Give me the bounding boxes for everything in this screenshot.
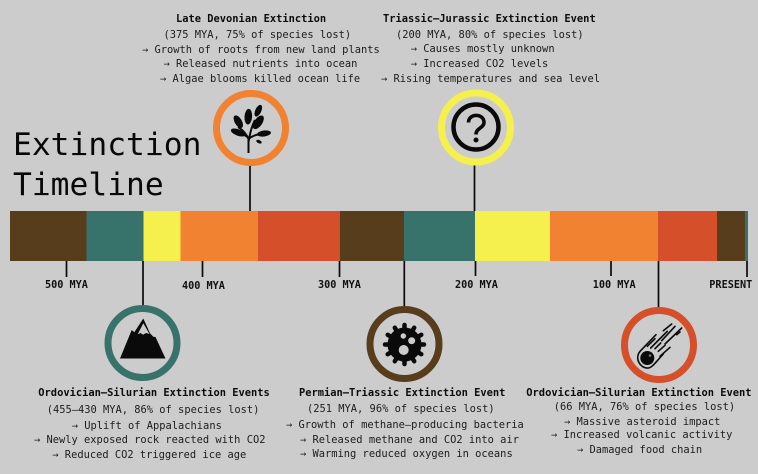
- panel: Permian-Triassic text: Permian–Triassic Extinction Event: [299, 387, 505, 399]
- panel: end-Cretaceous text: Ordovician–Silurian Extinction Event: [526, 387, 752, 399]
- title: [13, 127, 201, 203]
- title: Extinction: [13, 127, 201, 163]
- icon: bacteria in brown ring: [370, 310, 439, 378]
- panel: end-Cretaceous text: → Increased volcanic activity: [551, 429, 732, 441]
- panel: Permian-Triassic text: → Released methane and CO2 into air: [300, 434, 519, 446]
- panel: end-Cretaceous text: (66 MYA, 76% of species lost): [554, 401, 735, 413]
- time axis labels: [45, 280, 752, 292]
- panel: Permian-Triassic text: → Warming reduced oxygen in oceans: [300, 448, 513, 460]
- panel: Late Devonian text: → Growth of roots from new land plants: [142, 44, 380, 56]
- panel: Late Devonian text: [142, 13, 380, 85]
- panel: Ordovician-Silurian text: [34, 387, 270, 461]
- icon: mountain in teal ring: [108, 308, 177, 378]
- panel: Ordovician-Silurian text: Ordovician–Silurian Extinction Events: [38, 387, 270, 399]
- panel: Triassic-Jurassic text: → Causes mostly unknown: [411, 43, 555, 55]
- panel: Triassic-Jurassic text: → Increased CO2 levels: [411, 58, 548, 70]
- panel: Triassic-Jurassic text: (200 MYA, 80% of species lost): [396, 29, 584, 41]
- time axis labels: 200 MYA: [455, 280, 498, 291]
- panel: Ordovician-Silurian text: (455–430 MYA, 86% of species lost): [47, 404, 259, 416]
- panel: end-Cretaceous text: → Massive asteroid impact: [564, 416, 720, 428]
- panel: Permian-Triassic text: (251 MYA, 96% of species lost): [307, 403, 495, 415]
- connector lines and tick marks: [66, 164, 747, 308]
- time axis labels: 100 MYA: [593, 280, 636, 291]
- timeline bar: [10, 211, 748, 261]
- panel: end-Cretaceous text: → Damaged food chain: [577, 444, 702, 456]
- icon: asteroid in red ring: [624, 310, 694, 380]
- time axis labels: 300 MYA: [318, 280, 361, 291]
- icon: plant in orange ring: [216, 94, 286, 162]
- panel: Ordovician-Silurian text: → Newly exposed rock reacted with CO2: [34, 434, 265, 446]
- panel: end-Cretaceous text: [526, 387, 752, 456]
- panel: Permian-Triassic text: → Growth of methane–producing bacteria: [286, 419, 524, 431]
- panel: Ordovician-Silurian text: → Reduced CO2 triggered ice age: [52, 449, 246, 461]
- time axis labels: PRESENT: [709, 280, 752, 291]
- panel: Late Devonian text: → Algae blooms killed ocean life: [160, 73, 360, 85]
- time axis labels: 500 MYA: [45, 280, 88, 291]
- panel: Triassic-Jurassic text: Triassic–Jurassic Extinction Event: [383, 13, 596, 25]
- title: Timeline: [13, 167, 164, 203]
- panel: Permian-Triassic text: [286, 387, 524, 460]
- panel: Triassic-Jurassic text: [381, 13, 600, 85]
- panel: Late Devonian text: (375 MYA, 75% of species lost): [164, 29, 351, 41]
- panel: Triassic-Jurassic text: → Rising temperatures and sea level: [381, 73, 600, 85]
- panel: Ordovician-Silurian text: → Uplift of Appalachians: [72, 420, 222, 432]
- time axis labels: 400 MYA: [182, 281, 225, 292]
- panel: Late Devonian text: → Released nutrients into ocean: [164, 58, 357, 70]
- icon: question mark in yellow ring: [442, 93, 510, 162]
- panel: Late Devonian text: Late Devonian Extinction: [176, 13, 326, 25]
